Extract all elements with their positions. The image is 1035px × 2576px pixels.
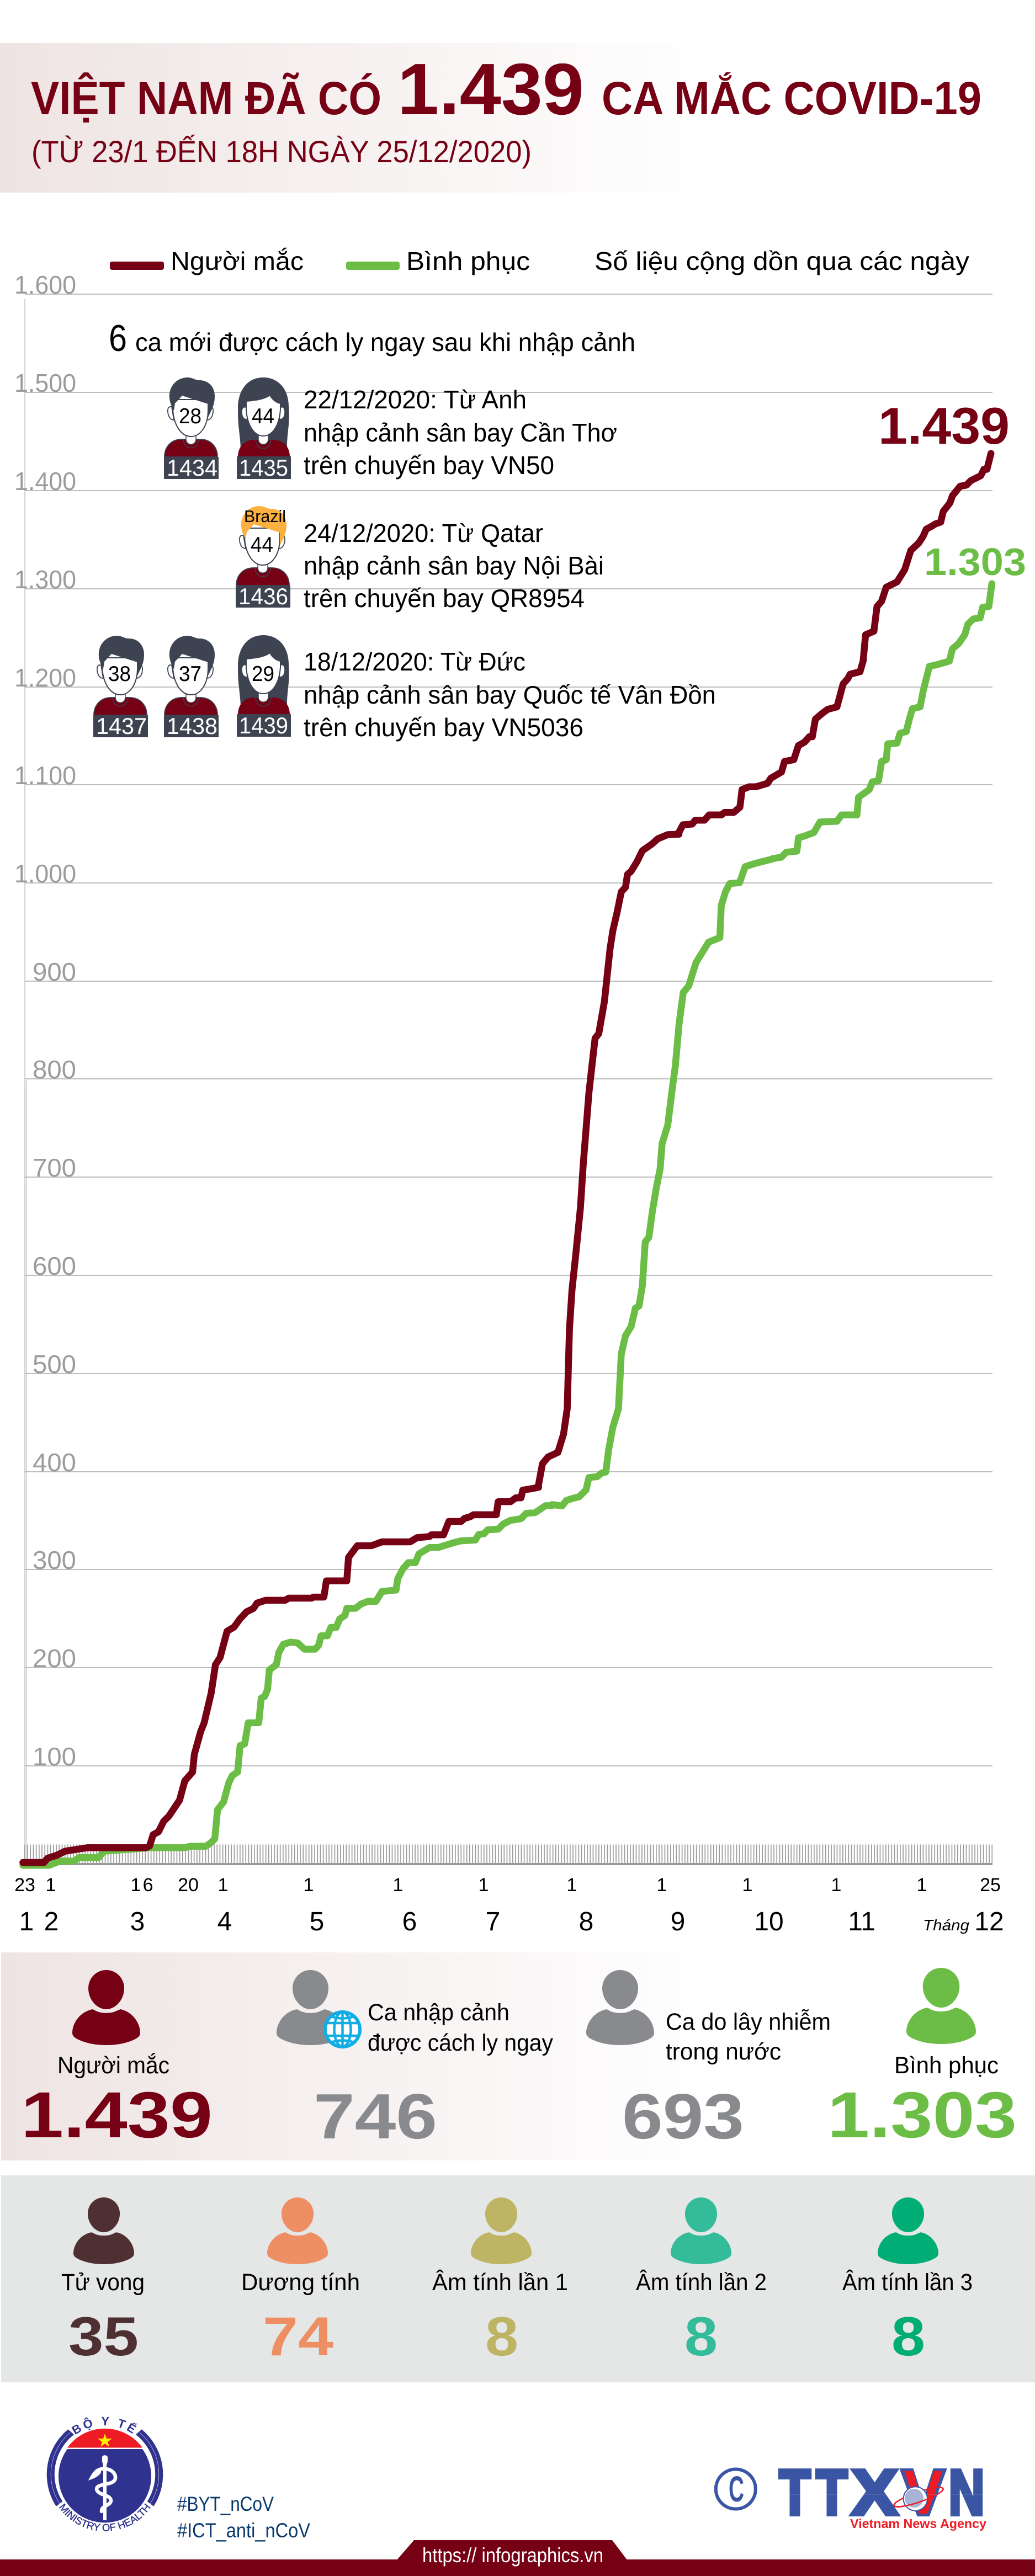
stat: recovered xyxy=(827,1968,1017,2152)
logo: TTXVN xyxy=(779,2457,986,2531)
case text: 22/12/2020: Từ Anh xyxy=(304,385,527,414)
case text: trên chuyến bay QR8954 xyxy=(304,584,585,613)
title band xyxy=(0,43,981,193)
y axis labels: 1.200 xyxy=(14,663,76,692)
new cases heading xyxy=(109,317,635,359)
title: VIỆT NAM ĐÃ CÓ xyxy=(31,72,381,124)
y axis labels: 1.100 xyxy=(14,761,76,790)
stat: imported cases: Ca nhập cảnh xyxy=(368,1999,509,2026)
footer url: https:// infographics.vn xyxy=(422,2544,603,2567)
x axis month labels: 8 xyxy=(579,1907,593,1936)
subtitle: (TỪ 23/1 ĐẾN 18H NGÀY 25/12/2020) xyxy=(31,134,532,169)
stat: domestic cases: Ca do lây nhiễm xyxy=(666,2009,831,2035)
panel: totals xyxy=(1,1952,1017,2160)
chart grid and axis xyxy=(24,294,992,1864)
y axis labels: 500 xyxy=(33,1350,76,1379)
logo: TTXVN: N xyxy=(948,2457,985,2529)
icon: patient 1436: 1436 xyxy=(238,583,288,609)
stat: negative twice: 8 xyxy=(684,2306,718,2367)
x axis day labels: 1 xyxy=(46,1875,56,1896)
x axis month labels: 3 xyxy=(130,1907,145,1936)
x axis month labels xyxy=(19,1907,1004,1936)
curve end value: confirmed: 1.439 xyxy=(878,397,1010,455)
case group: 18/12 from Germany xyxy=(93,635,716,742)
logo: TTXVN: Vietnam News Agency xyxy=(850,2516,986,2531)
x axis month labels: 4 xyxy=(217,1907,232,1936)
case text: 24/12/2020: Từ Qatar xyxy=(304,519,543,547)
x axis month labels: 12 xyxy=(974,1907,1004,1936)
x axis day labels: 1 xyxy=(304,1875,314,1896)
y axis labels: 1.500 xyxy=(14,369,76,397)
panel: treatment status xyxy=(1,2175,1035,2382)
y axis labels xyxy=(14,270,76,1771)
x axis day labels: 1 xyxy=(831,1875,841,1896)
x axis month labels: 6 xyxy=(402,1907,417,1936)
icon: patient 1435: 44 xyxy=(252,405,274,428)
case text: nhập cảnh sân bay Quốc tế Vân Đồn xyxy=(304,680,716,709)
stat: confirmed xyxy=(21,1970,213,2152)
stat: deaths: 35 xyxy=(68,2306,139,2367)
stat: imported cases: được cách ly ngay xyxy=(368,2030,553,2056)
x axis month labels: 1 xyxy=(19,1907,34,1936)
stat: domestic cases xyxy=(586,1970,831,2152)
icon: patient 1434: 1434 xyxy=(167,455,217,481)
icon: patient 1438: 37 xyxy=(179,662,201,686)
stat: negative three times: Âm tính lần 3 xyxy=(842,2269,973,2296)
stat: positive xyxy=(241,2197,360,2367)
y axis labels: 400 xyxy=(33,1448,76,1477)
x axis day labels: 1 xyxy=(742,1875,752,1896)
stat: imported cases xyxy=(277,1970,553,2152)
icon: patient 1435 xyxy=(237,377,291,481)
logo: ministry of health xyxy=(46,2417,163,2532)
x axis month labels: 7 xyxy=(486,1907,500,1936)
icon: patient 1437 xyxy=(93,636,148,739)
stat: confirmed: Người mắc xyxy=(57,2052,169,2079)
y axis labels: 700 xyxy=(33,1153,76,1182)
stat: negative once: Âm tính lần 1 xyxy=(432,2269,568,2296)
y axis labels: 100 xyxy=(33,1742,76,1771)
logo: TTXVN: T xyxy=(779,2457,810,2529)
x axis month labels: Tháng xyxy=(923,1917,969,1934)
title xyxy=(31,49,981,130)
x axis day labels: 20 xyxy=(178,1875,199,1896)
new cases heading: ca mới được cách ly ngay sau khi nhập cảnh xyxy=(135,328,635,356)
y axis labels: 800 xyxy=(33,1055,76,1084)
hashtags xyxy=(177,2493,310,2542)
x axis day labels: 1 xyxy=(218,1875,228,1896)
legend: Bình phục xyxy=(406,247,530,275)
x axis day labels: 1 xyxy=(393,1875,403,1896)
icon: patient 1438 xyxy=(164,636,219,739)
hashtags: #BYT_nCoV xyxy=(177,2493,274,2515)
logo: TTXVN: T xyxy=(816,2457,848,2529)
stat: deaths: Tử vong xyxy=(61,2269,145,2296)
x axis day labels: 1 xyxy=(917,1875,927,1896)
stat: negative three times: 8 xyxy=(891,2306,925,2367)
x axis month labels: 11 xyxy=(848,1907,875,1936)
stat: deaths xyxy=(61,2197,145,2367)
icon: patient 1439: 29 xyxy=(252,662,274,686)
logo: copyright mark: C xyxy=(729,2468,744,2509)
icon: patient 1436: 44 xyxy=(251,533,273,557)
icon: patient 1437: 38 xyxy=(108,662,131,686)
icon: patient 1436: Brazil xyxy=(244,507,286,526)
logo: ministry of health: BỘ Y TẾ xyxy=(71,2417,138,2435)
icon: patient 1434: 28 xyxy=(179,405,201,428)
x axis day labels: 23 xyxy=(14,1875,35,1896)
y axis labels: 1.600 xyxy=(14,270,76,299)
stat: negative twice xyxy=(636,2197,767,2367)
case text xyxy=(304,385,617,480)
stat: domestic cases: trong nước xyxy=(666,2039,781,2065)
x axis day labels: 16 xyxy=(130,1875,153,1896)
y axis labels: 1.400 xyxy=(14,467,76,496)
case text: trên chuyến bay VN5036 xyxy=(304,713,583,742)
x axis day labels: 25 xyxy=(980,1875,1001,1896)
case group: 22/12 from UK xyxy=(164,377,617,481)
hashtags: #ICT_anti_nCoV xyxy=(177,2519,310,2542)
stat: imported cases: 746 xyxy=(314,2080,437,2152)
y axis labels: 900 xyxy=(33,957,76,986)
stat: negative once: 8 xyxy=(485,2306,518,2367)
icon: patient 1438: 1438 xyxy=(167,713,217,739)
y axis labels: 600 xyxy=(33,1252,76,1280)
stat: recovered: 1.303 xyxy=(827,2079,1017,2152)
icon: patient 1437: 1437 xyxy=(96,713,147,739)
logo: TTXVN: V xyxy=(902,2457,945,2529)
icon: patient 1436 xyxy=(236,506,290,609)
logo: TTXVN: V xyxy=(904,2458,943,2527)
icon: globe xyxy=(323,2010,362,2048)
y axis labels: 200 xyxy=(33,1644,76,1673)
x axis month labels: 10 xyxy=(754,1907,784,1936)
stat: domestic cases: 693 xyxy=(622,2080,744,2152)
stat: negative twice: Âm tính lần 2 xyxy=(636,2269,767,2296)
case text: trên chuyến bay VN50 xyxy=(304,451,554,480)
title: 1.439 xyxy=(397,49,584,130)
y axis labels: 1.000 xyxy=(14,859,76,888)
curve: confirmed cases (maroon) xyxy=(23,454,991,1862)
case text xyxy=(304,647,716,742)
y axis labels: 300 xyxy=(33,1546,76,1574)
curve: recovered (green) xyxy=(23,584,992,1865)
case text xyxy=(304,519,604,613)
x axis day labels: 1 xyxy=(657,1875,667,1896)
x axis month labels: 5 xyxy=(310,1907,324,1936)
x axis day labels xyxy=(14,1875,1001,1896)
x axis day labels: 1 xyxy=(567,1875,577,1896)
y axis labels: 1.300 xyxy=(14,565,76,594)
x axis month labels: 2 xyxy=(44,1907,59,1936)
case group: 24/12 from Qatar xyxy=(236,506,604,613)
case text: nhập cảnh sân bay Nội Bài xyxy=(304,551,604,580)
icon: patient 1439 xyxy=(237,635,291,738)
x axis day labels: 1 xyxy=(479,1875,489,1896)
logo: TTXVN: X xyxy=(851,2457,898,2529)
case text: nhập cảnh sân bay Cần Thơ xyxy=(304,418,617,447)
x axis month labels: 9 xyxy=(671,1907,685,1936)
legend xyxy=(110,247,969,275)
stat: positive: 74 xyxy=(263,2306,333,2367)
stat: positive: Dương tính xyxy=(241,2269,360,2296)
footer bar xyxy=(0,2540,1035,2576)
logo: ministry of health: MINISTRY OF HEALTH xyxy=(59,2503,151,2532)
stat: confirmed: 1.439 xyxy=(21,2079,213,2152)
stat: negative three times xyxy=(842,2197,973,2367)
icon: patient 1434 xyxy=(164,377,219,481)
stat: recovered: Bình phục xyxy=(894,2052,999,2079)
legend: Số liệu cộng dồn qua các ngày xyxy=(595,247,969,275)
icon: patient 1435: 1435 xyxy=(239,455,288,481)
title: CA MẮC COVID-19 xyxy=(602,72,981,124)
logo: copyright mark xyxy=(716,2468,756,2509)
icon: patient 1439: 1439 xyxy=(239,712,288,738)
curve end value: recovered: 1.303 xyxy=(924,540,1026,583)
legend: Người mắc xyxy=(171,247,304,275)
new cases heading: 6 xyxy=(109,317,127,359)
stat: negative once xyxy=(432,2197,568,2367)
case text: 18/12/2020: Từ Đức xyxy=(304,647,526,676)
